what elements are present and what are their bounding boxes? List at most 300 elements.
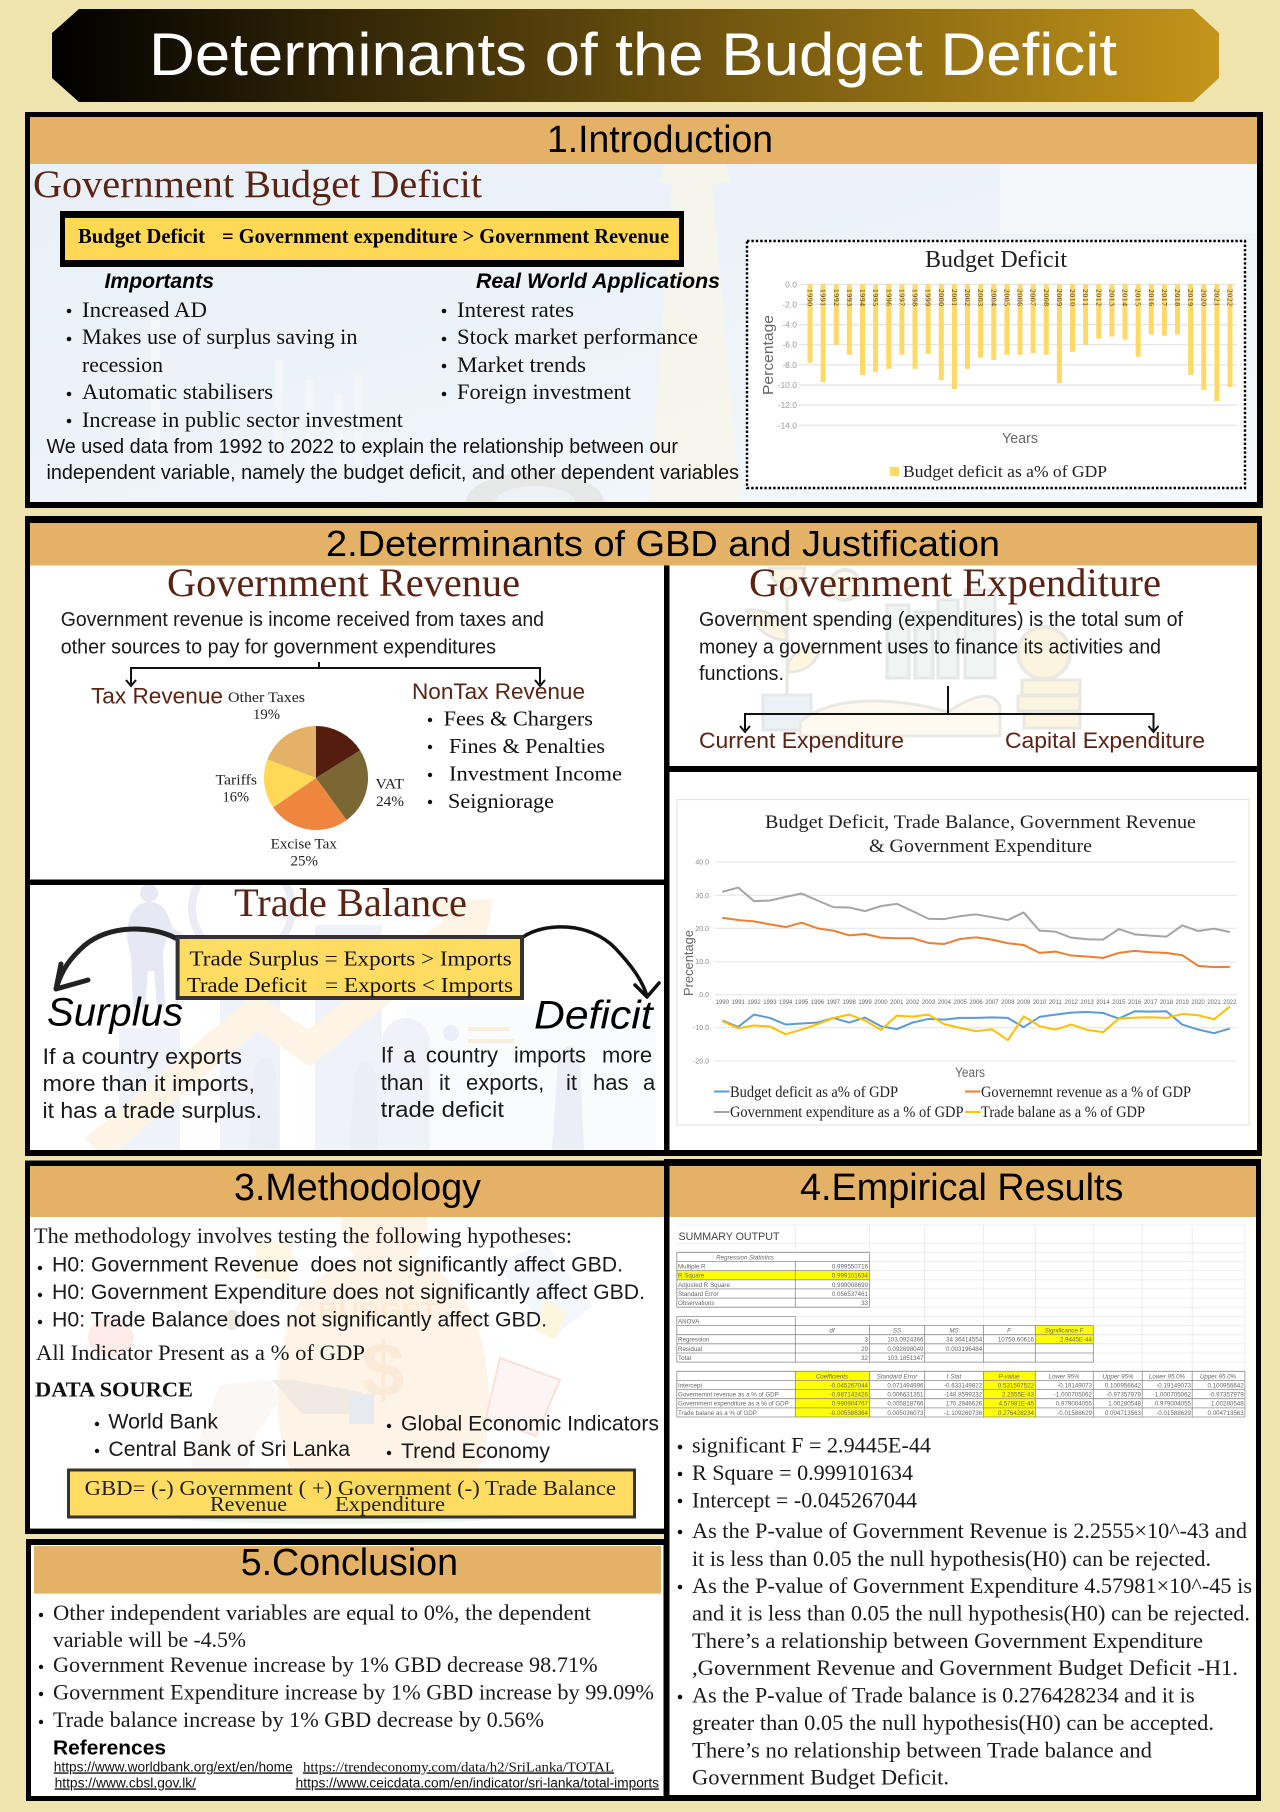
deficit text: If	[381, 1043, 394, 1068]
regression summary table: 0.071494996	[887, 1382, 924, 1389]
regression summary table: 0.003196484	[946, 1346, 983, 1353]
panel: 3 methodology: $	[362, 1328, 404, 1413]
deficit text: a	[643, 1070, 656, 1095]
bar chart: budget deficit: 1999	[924, 289, 933, 306]
regression summary table: -1.000705062	[1153, 1392, 1192, 1399]
results list	[678, 1433, 1252, 1789]
bar chart: budget deficit: 2007	[1029, 289, 1038, 306]
references: https://www.worldbank.org/ext/en/home	[54, 1759, 293, 1774]
regression summary table: 0.056537461	[832, 1291, 869, 1298]
regression summary table: Lower 95%	[1049, 1373, 1080, 1380]
regression summary table: -0.97357979	[1106, 1392, 1142, 1399]
panel: 2 determinants of GBD	[25, 516, 1262, 1156]
line chart: budget deficit, trade balance, revenue, expenditure: 2017	[1144, 1000, 1158, 1006]
regression summary table: Trade balane as a % of GDP	[678, 1410, 757, 1417]
bar chart: budget deficit: 1992	[832, 289, 841, 306]
sub-panel: trade balance: Trade Balance	[234, 880, 467, 925]
bar chart: budget deficit: 2011	[1081, 289, 1090, 306]
bar chart: budget deficit: -8.0	[782, 360, 797, 370]
regression summary table	[677, 1225, 1245, 1417]
line chart: budget deficit, trade balance, revenue, expenditure: 2001	[890, 1000, 904, 1006]
line chart: budget deficit, trade balance, revenue, expenditure: & Government Expenditure	[869, 836, 1092, 857]
pie chart: 25%	[290, 854, 318, 870]
results list: There’s no relationship between Trade balance and	[692, 1737, 1152, 1762]
arrow: to surplus	[56, 929, 176, 989]
results list: Government Budget Deficit.	[692, 1764, 949, 1789]
heading: 2.Determinants of GBD and Justification	[326, 523, 1000, 564]
regression summary table: 0.531597522	[998, 1382, 1035, 1389]
deficit text: it	[439, 1070, 450, 1095]
references: https://www.cbsl.gov.lk/	[55, 1775, 196, 1790]
bar chart: budget deficit: 2003	[976, 289, 985, 306]
bar chart: budget deficit: Years	[1002, 430, 1038, 447]
pie chart: Excise Tax	[271, 836, 337, 852]
bar chart: budget deficit: -4.0	[782, 320, 797, 330]
regression summary table: 0.990904767	[832, 1401, 869, 1408]
data description text: independent variable, namely the budget deficit, and other dependent variables	[46, 462, 739, 484]
deficit text: it	[566, 1070, 577, 1095]
panel: 3 methodology	[25, 1160, 670, 1534]
regression summary table: Regression	[678, 1337, 710, 1344]
line chart: budget deficit, trade balance, revenue, expenditure: 1997	[827, 1000, 841, 1006]
bar chart: budget deficit: Budget deficit as a% of GDP	[903, 462, 1107, 481]
pie chart: 24%	[376, 794, 404, 810]
bar chart: budget deficit: 2001	[950, 289, 959, 306]
regression summary table: -0.987142426	[830, 1392, 869, 1399]
GBD equation box: Revenue	[210, 1492, 287, 1516]
regression summary table: 103.0924366	[887, 1337, 924, 1344]
references: https://www.ceicdata.com/en/indicator/sri-lanka/total-imports	[296, 1775, 659, 1790]
title banner	[52, 9, 1219, 102]
surplus text: it has a trade surplus.	[42, 1098, 262, 1123]
bar chart: budget deficit: 1993	[845, 289, 854, 306]
line chart: budget deficit, trade balance, revenue, expenditure: 1994	[779, 1000, 793, 1006]
regression summary table: -148.8599232	[944, 1392, 983, 1399]
sub-panel: government revenue: NonTax Revenue	[412, 679, 585, 704]
non-tax list: Seigniorage	[448, 789, 554, 813]
bar chart: budget deficit: 2005	[1002, 289, 1011, 306]
line chart: budget deficit, trade balance, revenue, expenditure: 2021	[1207, 1000, 1221, 1006]
arrow: to deficit	[523, 927, 659, 997]
hypotheses: H0: Government Revenue does not significantly affect GBD.	[52, 1254, 623, 1277]
regression summary table: 170.2946626	[946, 1401, 983, 1408]
pie chart: 19%	[253, 707, 280, 723]
pie chart: Tariffs	[216, 772, 257, 788]
real world applications list: Market trends	[457, 352, 586, 377]
regression summary table: Regression Statistics	[716, 1254, 774, 1261]
regression summary table: Adjusted R Square	[678, 1282, 730, 1289]
regression summary table: 0.100956642	[1208, 1382, 1244, 1389]
sub-panel: government revenue	[61, 560, 622, 870]
regression summary table: 0.006631351	[887, 1392, 924, 1399]
deficit text: imports	[514, 1043, 586, 1068]
sub-panel: government expenditure: Current Expenditure	[699, 728, 904, 753]
regression summary table: Standard Error	[678, 1291, 719, 1298]
formula box	[60, 211, 684, 267]
pie chart: 16%	[222, 790, 249, 806]
regression summary table: -0.01588629	[1156, 1410, 1192, 1417]
sub-panel: government expenditure: Capital Expenditure	[1005, 728, 1205, 753]
regression summary table: -1.109269736	[944, 1410, 983, 1417]
line chart: budget deficit, trade balance, revenue, expenditure: 2010	[1033, 1000, 1047, 1006]
data source: Global Economic Indicators	[401, 1413, 659, 1436]
conclusion list: Other independent variables are equal to 0%, the dependent	[53, 1600, 591, 1625]
line chart: budget deficit, trade balance, revenue, expenditure: 2022	[1223, 1000, 1237, 1006]
panel: 5 conclusion	[26, 1539, 668, 1801]
regression summary table: 0.100956642	[1105, 1382, 1142, 1389]
regression summary table: 10750.60616	[998, 1337, 1035, 1344]
bar chart: budget deficit: 2008	[1042, 289, 1051, 306]
regression summary table: R Square	[678, 1273, 705, 1280]
bar chart: budget deficit: 1997	[897, 289, 906, 306]
formula box: = Government expenditure > Government Revenue	[222, 224, 669, 248]
sub-panel: government expenditure: money a government uses to finance its activities and	[699, 636, 1161, 658]
line chart: budget deficit, trade balance, revenue, expenditure: 2000	[874, 1000, 888, 1006]
deficit text: than	[381, 1070, 424, 1095]
sub-panel: government revenue: Government revenue is income received from taxes and	[61, 609, 544, 631]
line chart: budget deficit, trade balance, revenue, expenditure: Budget Deficit, Trade Balance, Government Revenue	[765, 812, 1196, 833]
results list: As the P-value of Trade balance is 0.276428234 and it is	[692, 1682, 1195, 1708]
regression summary table: 32	[861, 1355, 869, 1362]
sub-panel: government revenue: Government Revenue	[167, 560, 520, 605]
connector arrows	[126, 662, 545, 686]
bar chart: budget deficit: 2004	[989, 289, 998, 306]
hypotheses: The methodology involves testing the following hypotheses:	[34, 1223, 572, 1248]
GBD equation box: GBD= (-) Government ( +) Government (-) Trade Balance	[85, 1476, 616, 1500]
line chart: budget deficit, trade balance, revenue, expenditure: 10.0	[695, 959, 709, 966]
chart legend: Government expenditure as a % of GDP	[730, 1104, 964, 1121]
chart legend: Governemnt revenue as a % of GDP	[981, 1084, 1191, 1101]
GBD equation box: Expenditure	[335, 1492, 445, 1516]
line chart: budget deficit, trade balance, revenue, expenditure: 2005	[954, 1000, 968, 1006]
line chart: budget deficit, trade balance, revenue, expenditure: 2011	[1049, 1000, 1063, 1006]
line chart: budget deficit, trade balance, revenue, expenditure: 30.0	[695, 893, 709, 900]
header bar	[34, 1546, 661, 1594]
line chart: budget deficit, trade balance, revenue, expenditure: 1991	[732, 1000, 746, 1006]
results list: There’s a relationship between Government Expenditure	[692, 1628, 1203, 1653]
regression summary table: -0.005586364	[830, 1410, 869, 1417]
bar chart: budget deficit: 2014	[1120, 289, 1130, 306]
regression summary table: 0.005818766	[887, 1401, 924, 1408]
pie chart: Other Taxes	[228, 690, 305, 706]
regression summary table: Observations	[678, 1300, 714, 1307]
pie chart: VAT	[376, 777, 404, 793]
regression summary table: MS	[949, 1328, 960, 1334]
sub-panel: government revenue: other sources to pay for government expenditures	[61, 636, 496, 658]
hypotheses	[34, 1223, 645, 1365]
bar chart: budget deficit: 2013	[1107, 289, 1116, 306]
results list: greater than 0.05 the null hypothesis(H0) can be accepted.	[692, 1710, 1214, 1735]
panel: 1 introduction	[25, 112, 1263, 508]
sub-panel: trade balance	[42, 858, 659, 1150]
trade formula box: = Exports < Imports	[325, 973, 513, 997]
regression summary table: Standard Error	[877, 1373, 918, 1380]
line chart: budget deficit, trade balance, revenue, expenditure: -10.0	[693, 1025, 709, 1032]
conclusion list: Government Expenditure increase by 1% GBD increase by 99.09%	[53, 1680, 654, 1705]
regression summary table: Governemnt revenue as a % of GDP	[678, 1392, 779, 1399]
line chart: budget deficit, trade balance, revenue, expenditure: 2013	[1080, 1000, 1094, 1006]
panel: 4 empirical results	[664, 1159, 1261, 1801]
importants list: Makes use of surplus saving in	[82, 324, 358, 349]
regression summary table: Significance F	[1045, 1328, 1085, 1334]
header bar	[30, 117, 1257, 164]
regression summary table: 1.00280548	[1211, 1401, 1244, 1408]
trade formula box	[178, 937, 522, 998]
bar chart: budget deficit: -10.0	[778, 380, 797, 390]
regression summary table: Intercept	[678, 1382, 702, 1389]
deficit text	[381, 994, 656, 1122]
bar chart: budget deficit: 2016	[1147, 289, 1156, 306]
non-tax list: Fines & Penalties	[449, 734, 605, 758]
deficit text: exports,	[466, 1070, 544, 1095]
line chart: budget deficit, trade balance, revenue, expenditure: -20.0	[693, 1058, 709, 1066]
regression summary table: 0.999550716	[832, 1264, 869, 1270]
bar chart: budget deficit: Budget Deficit	[925, 247, 1067, 273]
bar chart: budget deficit: -2.0	[782, 299, 797, 309]
bar chart: budget deficit: 2020	[1199, 289, 1208, 306]
line chart: budget deficit, trade balance, revenue, expenditure: 2014	[1096, 1000, 1110, 1006]
line chart: budget deficit, trade balance, revenue, expenditure: 1996	[811, 1000, 825, 1006]
line chart: budget deficit, trade balance, revenue, expenditure: 2002	[906, 1000, 920, 1006]
regression summary table: 0.979004055	[1056, 1401, 1093, 1408]
regression summary table: -0.045267044	[830, 1382, 869, 1389]
hypotheses: All Indicator Present as a % of GDP	[36, 1340, 365, 1365]
results list: and it is less than 0.05 the null hypothesis(H0) can be rejected.	[692, 1601, 1250, 1626]
regression summary table: Multiple R	[678, 1264, 706, 1270]
regression summary table: Government expenditure as a % of GDP	[678, 1401, 789, 1408]
surplus text	[42, 991, 262, 1123]
bar chart: budget deficit: 1991	[819, 289, 828, 306]
bar chart: budget deficit: -12.0	[778, 400, 797, 410]
results list: As the P-value of Government Expenditure 4.57981×10^-45 is	[692, 1573, 1252, 1598]
heading: 1.Introduction	[547, 119, 773, 161]
real world applications list: Stock market performance	[457, 324, 698, 349]
line chart: budget deficit, trade balance, revenue, expenditure: Years	[955, 1065, 985, 1080]
regression summary table: SUMMARY OUTPUT	[678, 1231, 780, 1243]
deficit text: has	[593, 1070, 628, 1095]
line chart: budget deficit, trade balance, revenue, expenditure: 2019	[1176, 1000, 1190, 1006]
regression summary table: 3	[865, 1337, 869, 1344]
heading: 5.Conclusion	[241, 1542, 458, 1584]
panel: 3 methodology: BUDGET	[318, 1298, 439, 1323]
chart legend: Trade balane as a % of GDP	[981, 1104, 1145, 1121]
line chart: budget deficit, trade balance, revenue, expenditure: 2018	[1160, 1000, 1174, 1006]
regression summary table: -1.000705062	[1054, 1392, 1093, 1399]
formula box: Budget Deficit	[78, 224, 205, 248]
header bar	[670, 1166, 1256, 1217]
line chart: budget deficit, trade balance, revenue, expenditure: Precentage	[681, 930, 696, 996]
regression summary table: df	[829, 1328, 836, 1334]
bar chart: budget deficit: -14.0	[778, 420, 797, 430]
line chart: budget deficit, trade balance, revenue, expenditure: 2009	[1017, 1000, 1031, 1006]
deficit text: Deficit	[534, 994, 655, 1038]
regression summary table: Upper 95%	[1103, 1373, 1134, 1380]
bar chart: budget deficit: 0.0	[785, 279, 797, 289]
importants list	[67, 270, 403, 432]
bar chart: budget deficit: 2022	[1226, 289, 1234, 306]
conclusion list: variable will be -4.5%	[53, 1627, 246, 1652]
bar chart: budget deficit: 2012	[1094, 289, 1103, 306]
line chart: budget deficit, trade balance, revenue, expenditure: 20.0	[695, 926, 709, 933]
regression summary table: 2.9445E-44	[1060, 1337, 1093, 1344]
regression summary table: 0.004713563	[1208, 1410, 1244, 1417]
real world applications list: Real World Applications	[476, 270, 720, 293]
line chart: budget deficit, trade balance, revenue, expenditure: 2016	[1128, 1000, 1142, 1006]
line chart: budget deficit, trade balance, revenue, expenditure: 1990	[716, 1000, 730, 1006]
regression summary table: 2.2555E-43	[1002, 1392, 1035, 1399]
sub-panel: government expenditure	[699, 560, 1205, 753]
bar chart: budget deficit: 2000	[937, 289, 946, 306]
conclusion list	[39, 1600, 654, 1732]
line chart: budget deficit, trade balance, revenue, expenditure: 1992	[747, 1000, 761, 1006]
line chart: budget deficit, trade balance, revenue, expenditure: 1999	[858, 1000, 872, 1006]
regression summary table: 33	[861, 1300, 869, 1307]
sub-panel: government revenue: Tax Revenue	[91, 684, 223, 709]
data source: Trend Economy	[401, 1440, 551, 1463]
deficit text: country	[426, 1043, 498, 1068]
data source: DATA SOURCE	[35, 1378, 193, 1402]
references: https://trendeconomy.com/data/h2/SriLanka/TOTAL	[303, 1760, 614, 1775]
results list: significant F = 2.9445E-44	[692, 1433, 931, 1458]
trade formula box: Trade Surplus = Exports > Imports	[190, 946, 512, 970]
line chart: budget deficit, trade balance, revenue, expenditure: 0.0	[699, 992, 709, 999]
bar chart: budget deficit: 1994	[858, 289, 867, 306]
hypotheses: H0: Government Expenditure does not significantly affect GBD.	[52, 1281, 645, 1304]
results list: ,Government Revenue and Government Budget Deficit -H1.	[692, 1655, 1238, 1680]
line chart: budget deficit, trade balance, revenue, expenditure: 2012	[1065, 1000, 1079, 1006]
regression summary table: 0.276428234	[998, 1410, 1035, 1417]
line chart: budget deficit, trade balance, revenue, expenditure: 2004	[938, 1000, 952, 1006]
line chart: budget deficit, trade balance, revenue, expenditure: 1995	[795, 1000, 809, 1006]
header bar	[30, 1166, 664, 1217]
results list: Intercept = -0.045267044	[692, 1488, 917, 1512]
sub-panel: government expenditure: Government spending (expenditures) is the total sum of	[699, 609, 1183, 631]
regression summary table: 103.1851347	[887, 1355, 924, 1362]
line chart: budget deficit, trade balance, revenue, expenditure: 2015	[1112, 1000, 1126, 1006]
regression summary table: 0.092698049	[887, 1346, 924, 1353]
regression summary table: Total	[678, 1355, 691, 1362]
references	[53, 1738, 659, 1790]
non-tax list: Investment Income	[449, 762, 622, 786]
non-tax list: Fees & Chargers	[444, 706, 593, 730]
bar chart: budget deficit: 2019	[1186, 289, 1195, 306]
bar chart: budget deficit: 2018	[1173, 289, 1182, 306]
regression summary table: F	[1007, 1328, 1012, 1334]
line chart: budget deficit, trade balance, revenue, expenditure	[677, 800, 1249, 1125]
line chart: budget deficit, trade balance, revenue, expenditure: 2020	[1191, 1000, 1205, 1006]
conclusion list: Trade balance increase by 1% GBD decrease by 0.56%	[53, 1707, 544, 1732]
regression summary table: 0.999008699	[832, 1282, 869, 1289]
line chart: budget deficit, trade balance, revenue, expenditure: 2006	[969, 1000, 983, 1006]
bar chart: budget deficit: 2017	[1160, 289, 1169, 306]
regression summary table: 0.005036073	[887, 1410, 924, 1417]
regression summary table: -0.19149073	[1156, 1382, 1192, 1389]
bar chart: budget deficit: -6.0	[782, 340, 797, 350]
data description text: We used data from 1992 to 2022 to explain the relationship between our	[46, 436, 678, 458]
surplus text: Surplus	[47, 991, 183, 1035]
real world applications list: Foreign investment	[457, 379, 631, 404]
regression summary table: SS	[893, 1328, 902, 1334]
line chart: budget deficit, trade balance, revenue, expenditure: 2003	[922, 1000, 936, 1006]
regression summary table: ANOVA	[678, 1318, 700, 1325]
heading: 4.Empirical Results	[800, 1167, 1123, 1209]
data source	[35, 1378, 659, 1463]
GBD equation box	[68, 1470, 634, 1517]
results list: R Square = 0.999101634	[692, 1460, 913, 1485]
bar chart: budget deficit: 2006	[1016, 289, 1024, 306]
regression summary table: Residual	[678, 1346, 702, 1353]
header bar	[30, 523, 1257, 566]
regression summary table: 1.00280548	[1108, 1401, 1142, 1408]
regression summary table: 34.36414554	[946, 1337, 983, 1344]
importants list: Automatic stabilisers	[82, 379, 273, 404]
regression summary table: 29	[861, 1346, 869, 1353]
sub-panel: government expenditure: Government Expenditure	[749, 560, 1161, 605]
results list: As the P-value of Government Revenue is 2.2555×10^-43 and	[692, 1518, 1247, 1543]
regression summary table: -0.19149073	[1057, 1382, 1093, 1389]
regression summary table: -0.633149822	[944, 1382, 983, 1389]
deficit text: a	[403, 1043, 416, 1068]
line chart: budget deficit, trade balance, revenue, expenditure: 1998	[843, 1000, 857, 1006]
bar chart: budget deficit: 2009	[1055, 289, 1064, 306]
results list: it is less than 0.05 the null hypothesis(H0) can be rejected.	[692, 1546, 1211, 1571]
bar chart: budget deficit: 2010	[1068, 289, 1077, 306]
real world applications list	[442, 270, 720, 404]
regression summary table: -0.01588629	[1057, 1410, 1093, 1417]
bar chart: budget deficit: 1998	[910, 289, 920, 306]
importants list: Increased AD	[82, 297, 207, 322]
bar chart: budget deficit: 2002	[963, 289, 972, 306]
data source: Central Bank of Sri Lanka	[108, 1438, 350, 1461]
deficit text: more	[602, 1043, 652, 1068]
subheading: Government Budget Deficit	[33, 163, 482, 206]
regression summary table: -0.97357979	[1209, 1392, 1244, 1399]
real world applications list: Interest rates	[457, 297, 574, 322]
conclusion list: Government Revenue increase by 1% GBD decrease 98.71%	[53, 1652, 598, 1677]
pie chart	[216, 690, 404, 870]
bar chart: budget deficit: 2021	[1212, 289, 1221, 306]
bar chart: budget deficit: 1995	[871, 289, 880, 306]
regression summary table: 0.999101634	[832, 1273, 869, 1280]
surplus text: more than it imports,	[42, 1071, 255, 1096]
sub-panel: government expenditure: functions.	[699, 663, 784, 685]
surplus text: If a country exports	[42, 1044, 242, 1069]
references: References	[53, 1738, 166, 1760]
bar chart: budget deficit: 1996	[884, 289, 893, 306]
heading: 3.Methodology	[234, 1167, 481, 1209]
importants list: recession	[82, 352, 163, 377]
trade formula box: Trade Deficit	[187, 973, 307, 997]
regression summary table: t Stat	[947, 1373, 961, 1380]
line chart: budget deficit, trade balance, revenue, expenditure: 1993	[763, 1000, 777, 1006]
chart legend	[714, 1084, 1191, 1121]
bar chart: budget deficit: 2015	[1134, 289, 1143, 306]
title banner: Determinants of the Budget Deficit	[149, 21, 1117, 88]
bar chart: budget deficit: 1990	[806, 289, 814, 306]
importants list: Increase in public sector investment	[82, 407, 403, 432]
chart legend: Budget deficit as a% of GDP	[730, 1084, 898, 1101]
regression summary table: Coefficients	[816, 1373, 848, 1380]
regression summary table: Lower 95.0%	[1149, 1373, 1186, 1380]
data source: World Bank	[108, 1411, 218, 1434]
bar chart: budget deficit	[747, 241, 1245, 488]
line chart: budget deficit, trade balance, revenue, expenditure: 40.0	[695, 860, 709, 866]
regression summary table: 0.979004055	[1155, 1401, 1192, 1408]
regression summary table: 0.004713563	[1105, 1410, 1142, 1417]
line chart: budget deficit, trade balance, revenue, expenditure: 2008	[1001, 1000, 1015, 1006]
hypotheses: H0: Trade Balance does not significantly affect GBD.	[52, 1308, 547, 1331]
regression summary table: Upper 95.0%	[1200, 1373, 1237, 1380]
